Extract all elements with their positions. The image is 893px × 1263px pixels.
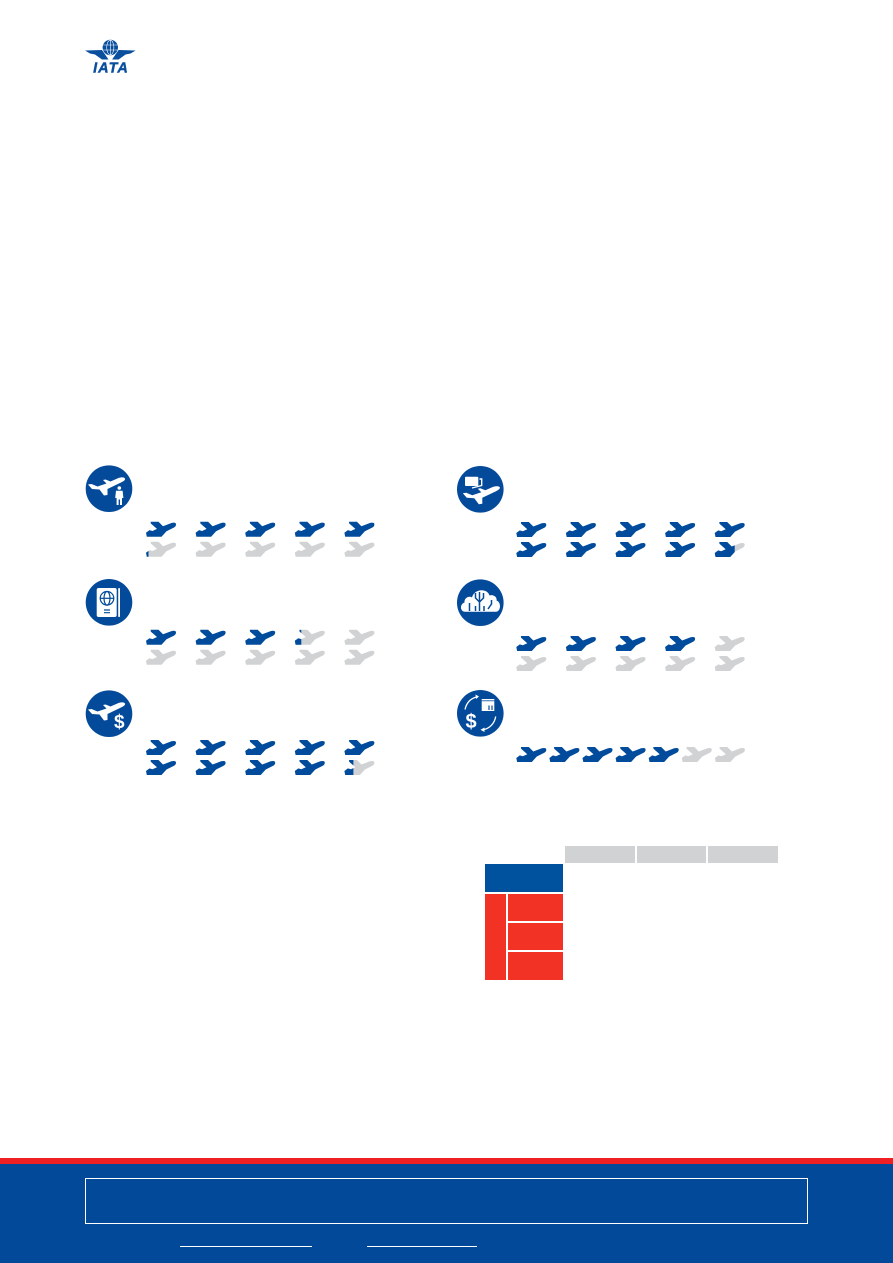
panel: cargo (457, 466, 745, 557)
pictogram: plane rows (146, 630, 374, 665)
table (485, 846, 778, 980)
logo wings (85, 50, 136, 60)
table blue header (485, 864, 563, 892)
footer outlined box (86, 1178, 808, 1224)
footer blue band (0, 1164, 893, 1263)
logo globe (103, 40, 118, 55)
table red row labels (485, 894, 563, 980)
panel: passport (86, 579, 374, 665)
icon: boxes and plane (457, 466, 504, 513)
pictogram: plane rows (516, 636, 745, 671)
panel: passengers (86, 465, 374, 557)
icon: dollar and box cycle: $ (465, 711, 477, 733)
icon: dollar and box cycle (457, 690, 504, 737)
icon: plane and person (86, 465, 132, 512)
panel: revenue (86, 690, 374, 775)
footer red stripe (0, 1158, 893, 1164)
pictogram: plane rows (146, 522, 374, 557)
pictogram: plane row (516, 747, 745, 762)
pictogram: plane rows (516, 522, 745, 557)
pictogram: plane rows (146, 740, 374, 775)
logo wordmark: IATA (93, 60, 129, 76)
IATA logo (85, 40, 136, 76)
icon: plane and dollar (86, 690, 132, 737)
icon: plane and dollar: $ (114, 712, 125, 733)
icon: passport (86, 579, 132, 626)
icon: cloud network (457, 579, 504, 626)
table column headers (565, 846, 778, 863)
footer link underlines (180, 1246, 477, 1248)
panel: cargo revenue (457, 690, 745, 762)
panel: digital (457, 579, 745, 671)
footer (0, 1158, 893, 1263)
